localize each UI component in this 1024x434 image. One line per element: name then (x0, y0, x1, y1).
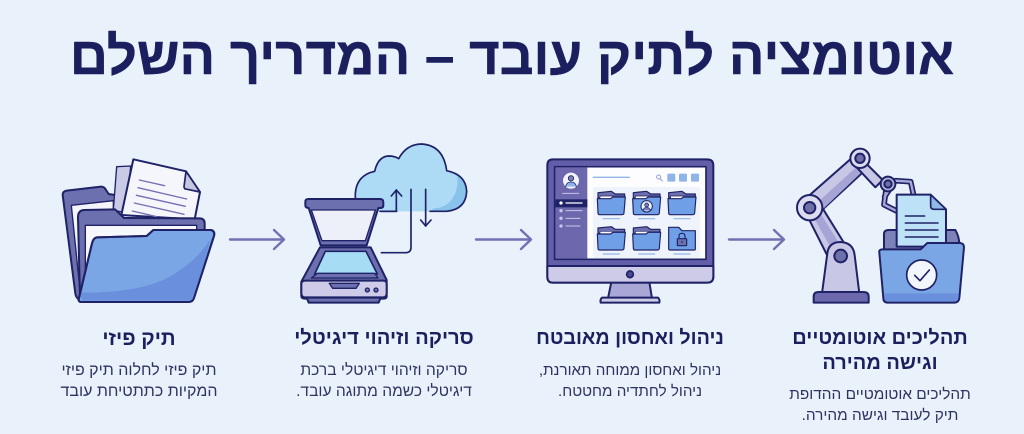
heading: scanning: סריקה וזיהוי דיגיטלי (294, 327, 474, 349)
cloud arrows (381, 189, 431, 253)
text: automation description: תיק לעובד וגישה מהירה. (802, 406, 958, 424)
heading: management: ניהול ואחסון מאובטח (536, 327, 724, 349)
text: automation description (789, 386, 971, 424)
heading: automation (792, 327, 968, 374)
text: management description: ניהול ואחסון ממוחה תאורנת, (539, 362, 721, 379)
scanner lid (305, 199, 383, 245)
title: אוטומציה לתיק עובד – המדריך השלם (70, 27, 954, 86)
scanner base (301, 247, 387, 303)
text: automation description: תהליכים אוטומטיים ההדופת (789, 386, 971, 403)
folders grid (597, 191, 696, 254)
cloud (355, 144, 467, 211)
panel: scanning text (294, 327, 474, 400)
panel: automation text (789, 327, 971, 424)
text: physical file description: המקיות כתתטיחת עובד (61, 382, 217, 400)
text: scanning description: סריקה וזיהוי דיגיטלי ברכת (300, 362, 468, 379)
text: physical file description: תיק פיזי לחלוה תיק פיזי (61, 362, 217, 379)
panel: physical file text (60, 327, 217, 400)
heading: physical file: תיק פיזי (102, 327, 176, 350)
text: scanning description: דיגיטלי כשמה מתוגה עובד. (296, 382, 472, 400)
heading: automation: וגישה מהירה (822, 352, 938, 374)
icon: open paper folder (63, 159, 214, 302)
arrow 3 (729, 230, 784, 249)
panel: management text (536, 327, 724, 400)
text: physical file description (60, 362, 217, 400)
text: scanning description (296, 362, 472, 400)
arrow 1 (230, 230, 284, 249)
text: management description: ניהול לחתדיה מחטטח. (558, 382, 702, 400)
icon: monitor with folder manager (547, 159, 713, 303)
icon: scanner with cloud (301, 144, 467, 303)
folder with document (879, 195, 964, 303)
arrow 2 (476, 230, 531, 249)
heading: automation: תהליכים אוטומטיים (792, 327, 968, 349)
text: management description (539, 362, 721, 400)
icon: robot arm with folder (797, 149, 964, 303)
